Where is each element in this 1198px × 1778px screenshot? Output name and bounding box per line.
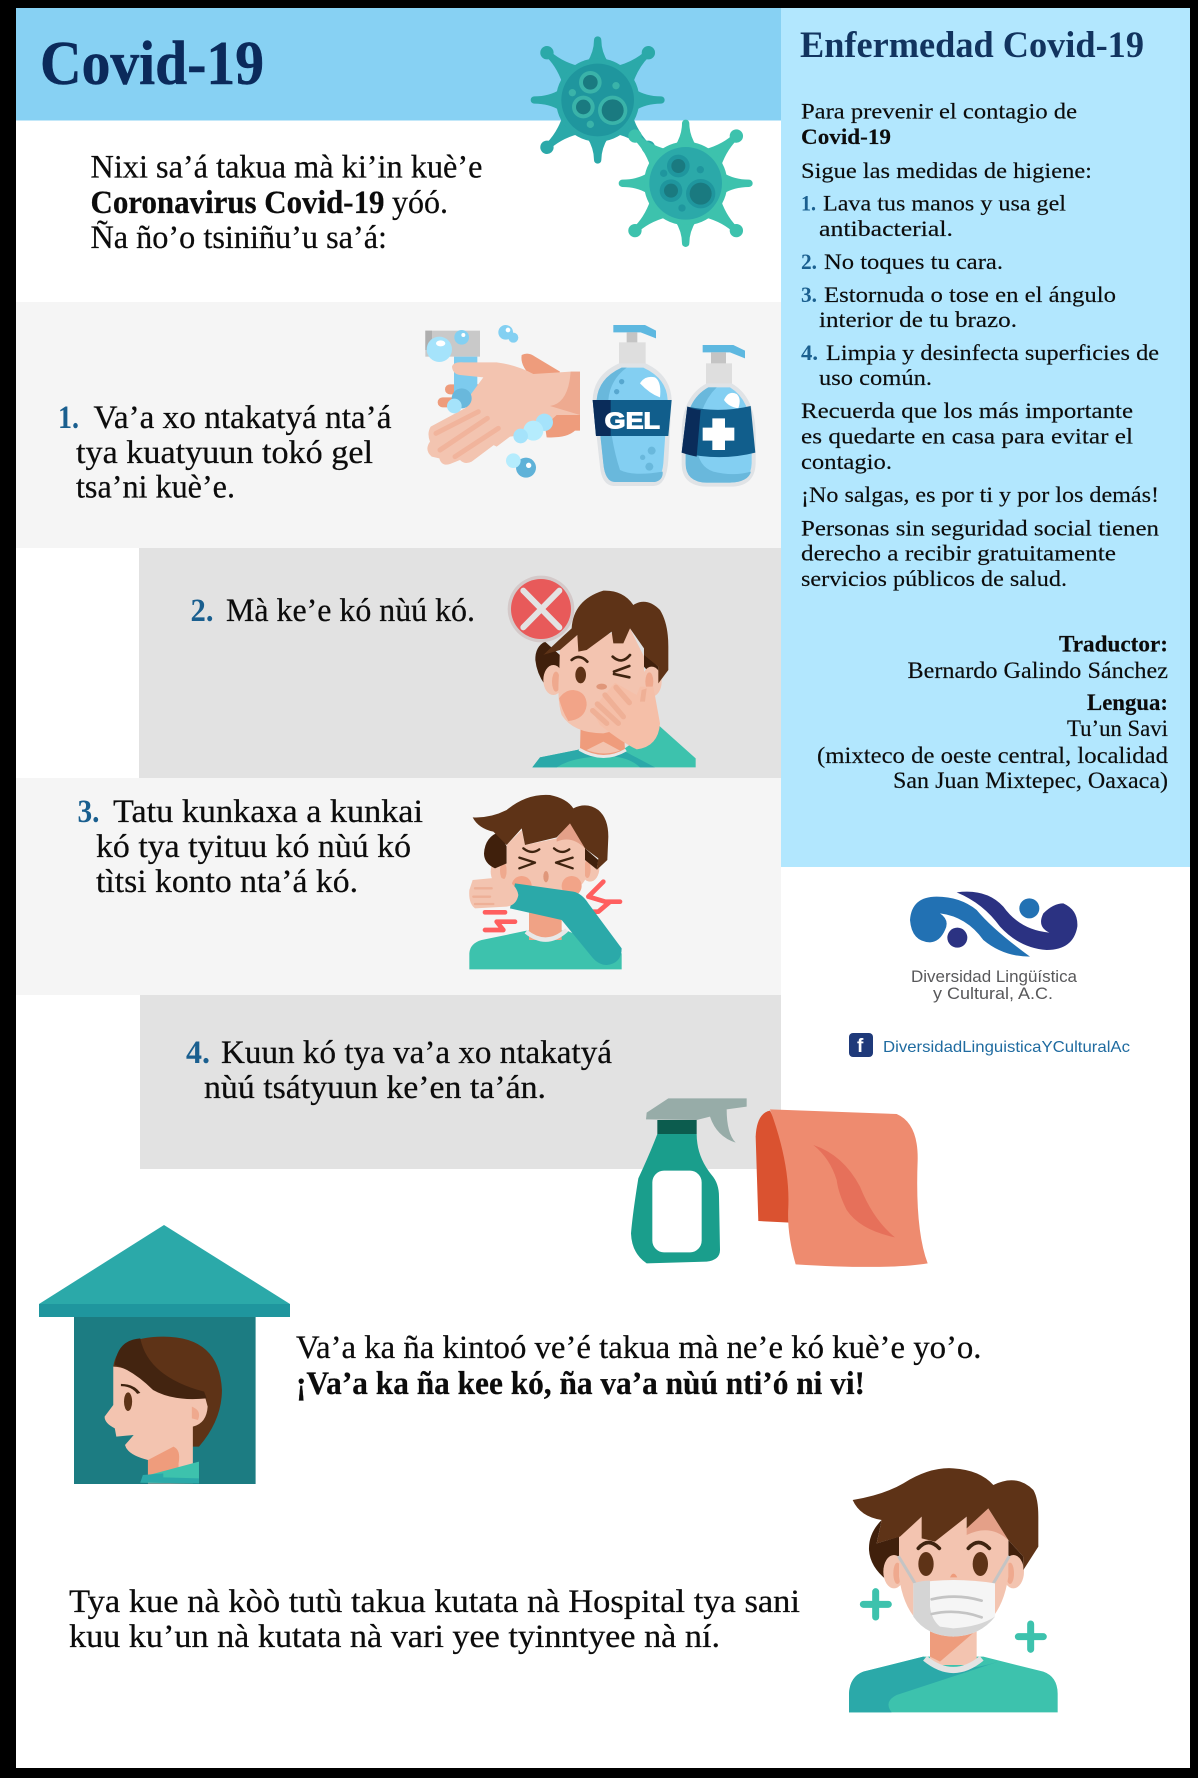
sidebar: prevention text: antibacterial. [819,216,953,241]
icon: person at home [39,1225,290,1484]
icon: gel bottle [593,325,672,486]
sidebar: prevention text: 1. [801,190,816,216]
header band [16,8,781,120]
sidebar: prevention text: Covid-19 [801,124,891,149]
sidebar: prevention text: Personas sin seguridad social tienen [801,516,1159,540]
icon: back fingers [443,389,480,402]
icon: hands [427,354,580,465]
sidebar: prevention text: 3. [801,282,817,307]
icon: cross bottle [682,345,756,487]
step 1 text: Va’a xo ntakatyá nta’á [94,400,392,436]
icon: faucet [425,331,480,357]
sidebar: prevention text: Sigue las medidas de higiene: [801,158,1092,183]
stay home text [296,1330,982,1402]
step 3 text: tìtsi konto nta’á kó. [96,864,358,900]
sidebar: prevention text: ¡No salgas, es por ti y por los demás! [801,482,1159,507]
sidebar: prevention text: derecho a recibir gratuitamente [801,540,1116,566]
sidebar: prevention text [801,98,1159,591]
icon: hand washing and gel bottles [425,325,756,487]
sidebar heading: Enfermedad Covid-19 [800,25,1144,66]
sidebar: prevention text: No toques tu cara. [824,249,1003,274]
step 4 text: 4. [186,1035,210,1071]
sidebar: credits: San Juan Mixtepec, Oaxaca) [893,768,1168,793]
sidebar: credits: Traductor: [1059,632,1168,656]
panel: sidebar background [781,8,1190,867]
icon: spray bottle [631,1098,747,1263]
icon: plus signs [863,1592,1043,1649]
title: Covid-19 [40,30,264,98]
icon: virus pair [531,36,753,247]
sidebar: prevention text: uso común. [819,365,932,390]
sidebar: credits: Bernardo Galindo Sánchez [908,658,1168,683]
panel: step 3 background [16,778,781,995]
intro text [90,150,482,256]
step 2 text: 2. [190,593,214,629]
step 3 text: kó tya tyituu kó nùú kó [96,829,411,865]
step 3 text: 3. [78,794,100,830]
icon: face mask [913,1580,995,1637]
step 1 text: tya kuatyuun tokó gel [76,435,373,471]
sidebar: prevention text: servicios públicos de salud. [801,566,1067,591]
logo text: y Cultural, A.C. [933,985,1053,1003]
sidebar: prevention text: Estornuda o tose en el ángulo [824,282,1116,307]
step 4 text: nùú tsátyuun ke’en ta’án. [204,1070,546,1106]
icon: profile head [105,1337,222,1483]
icon: soap bubbles [427,325,553,478]
sidebar: prevention text: Lava tus manos y usa gel [823,190,1066,216]
hospital text: kuu ku’un nà kutata nà vari yee tyinntyee nà ní. [69,1619,720,1655]
icon: boy not touching face [508,576,696,767]
icon: boy wearing mask [849,1468,1058,1712]
icon: boy sneezing into elbow [469,795,622,969]
logo text: Diversidad Lingüística [911,968,1078,986]
facebook handle: DiversidadLinguisticaYCulturalAc [883,1039,1130,1056]
icon: water stream [454,357,477,398]
sidebar: credits: Lengua: [1087,690,1168,715]
sidebar: credits: (mixteco de oeste central, localidad [817,743,1169,768]
icon: prohibition badge [508,576,574,642]
intro text: Nixi sa’á takua mà ki’in kuè’e [90,150,482,186]
step 3 text [78,794,423,900]
panel: step 2 background [139,548,781,778]
icon: house body [74,1317,256,1484]
hospital text: Tya kue nà kòò tutù takua kutata nà Hospital tya sani [69,1584,800,1620]
logo mark [910,892,1077,957]
intro text: Coronavirus Covid-19 [90,185,384,221]
step 1 text: 1. [58,400,79,436]
sidebar: prevention text: Recuerda que los más importante [801,398,1133,423]
intro text: yóó. [392,185,448,221]
sidebar: prevention text: 4. [801,340,818,365]
icon: spray bottle and towel [631,1098,928,1267]
sidebar: prevention text: interior de tu brazo. [819,307,1017,332]
panel: step 4 background [140,995,781,1169]
intro text: Ña ño’o tsiniñu’u sa’á: [90,219,387,256]
sidebar: prevention text: Para prevenir el contagio de [801,98,1077,124]
step 1 text [58,400,392,506]
stay home text: Va’a ka ña kintoó ve’é takua mà ne’e kó kuè’e yo’o. [296,1330,982,1366]
step 4 text: Kuun kó tya va’a xo ntakatyá [221,1035,612,1071]
sidebar: prevention text: es quedarte en casa para evitar el [801,424,1133,448]
sidebar: prevention text: 2. [801,249,817,274]
icon: gel bottle: GEL [605,407,660,433]
sidebar: prevention text: Limpia y desinfecta superficies de [826,340,1159,365]
sidebar: credits [817,632,1169,793]
stay home text: ¡Va’a ka ña kee kó, ña va’a nùú nti’ó ni vi! [296,1366,865,1402]
step 4 text [186,1035,612,1106]
icon: roof [39,1225,290,1317]
step 3 text: Tatu kunkaxa a kunkai [113,794,423,830]
sidebar: prevention text: contagio. [801,449,892,474]
hospital text [69,1584,800,1655]
logo text [911,968,1078,1003]
panel: step 1 background [16,302,781,548]
sidebar: credits: Tu’un Savi [1067,716,1168,741]
icon: facebook [849,1033,873,1057]
step 1 text: tsa’ni kuè’e. [76,470,235,506]
icon: facebook: f [857,1036,864,1057]
step 2 text: Mà ke’e kó nùú kó. [226,593,475,629]
icon: towel [756,1109,928,1267]
